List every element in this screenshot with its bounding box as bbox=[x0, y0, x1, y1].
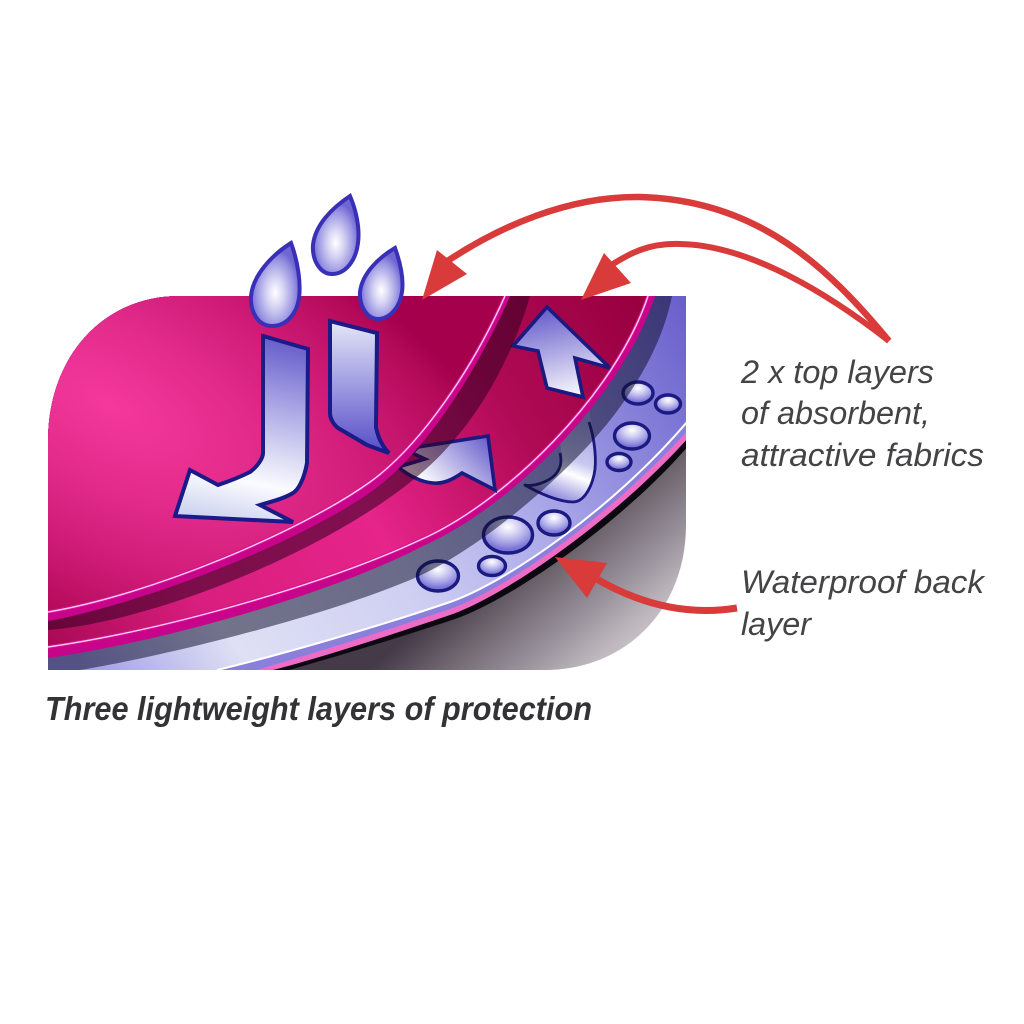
waterproof back layer bbox=[48, 296, 686, 670]
water beads on the membrane bbox=[418, 382, 680, 591]
sideways arrow in second layer bbox=[398, 436, 495, 490]
lavender middle layer bbox=[40, 296, 690, 672]
arrow: to top fabric layer bbox=[422, 197, 889, 341]
up arrow in second layer bbox=[513, 307, 610, 397]
text block: top layers label: attractive fabrics bbox=[741, 437, 984, 473]
top layer highlight line bbox=[48, 296, 505, 612]
top layer white line bbox=[48, 296, 505, 612]
dark shadow under top fabric layer bbox=[40, 296, 530, 632]
text block: back layer label bbox=[741, 564, 986, 642]
second layer highlight line bbox=[48, 296, 648, 647]
text block: back layer label: layer bbox=[741, 606, 812, 642]
icon: large J arrow pointing down-left bbox=[175, 336, 308, 522]
second absorbent fabric layer bbox=[40, 296, 648, 649]
top layer edge band bbox=[40, 296, 510, 623]
white line on membrane bbox=[217, 422, 687, 670]
pink membrane band bbox=[257, 432, 686, 670]
icon: curved arrow going down bbox=[330, 321, 389, 453]
purple membrane band bbox=[222, 424, 686, 670]
second layer edge band bbox=[40, 296, 655, 660]
icon: water droplets bbox=[251, 196, 403, 326]
text block: back layer label: Waterproof back bbox=[741, 564, 986, 600]
panel: layered fabric cross-section bbox=[40, 296, 690, 672]
swoosh arrow behind the fabric bbox=[525, 400, 596, 502]
caption: Three lightweight layers of protection bbox=[45, 690, 592, 727]
black edge of back layer bbox=[40, 296, 690, 672]
arrow: to second fabric layer bbox=[581, 244, 889, 341]
grey shadow under second fabric layer bbox=[40, 296, 672, 672]
text block: top layers label: of absorbent, bbox=[741, 395, 930, 431]
top absorbent fabric layer bbox=[40, 296, 505, 614]
arrow: to waterproof back layer bbox=[555, 557, 737, 611]
text block: top layers label: 2 x top layers bbox=[740, 354, 934, 390]
text block: top layers label bbox=[740, 354, 984, 473]
second layer white line bbox=[48, 296, 648, 647]
